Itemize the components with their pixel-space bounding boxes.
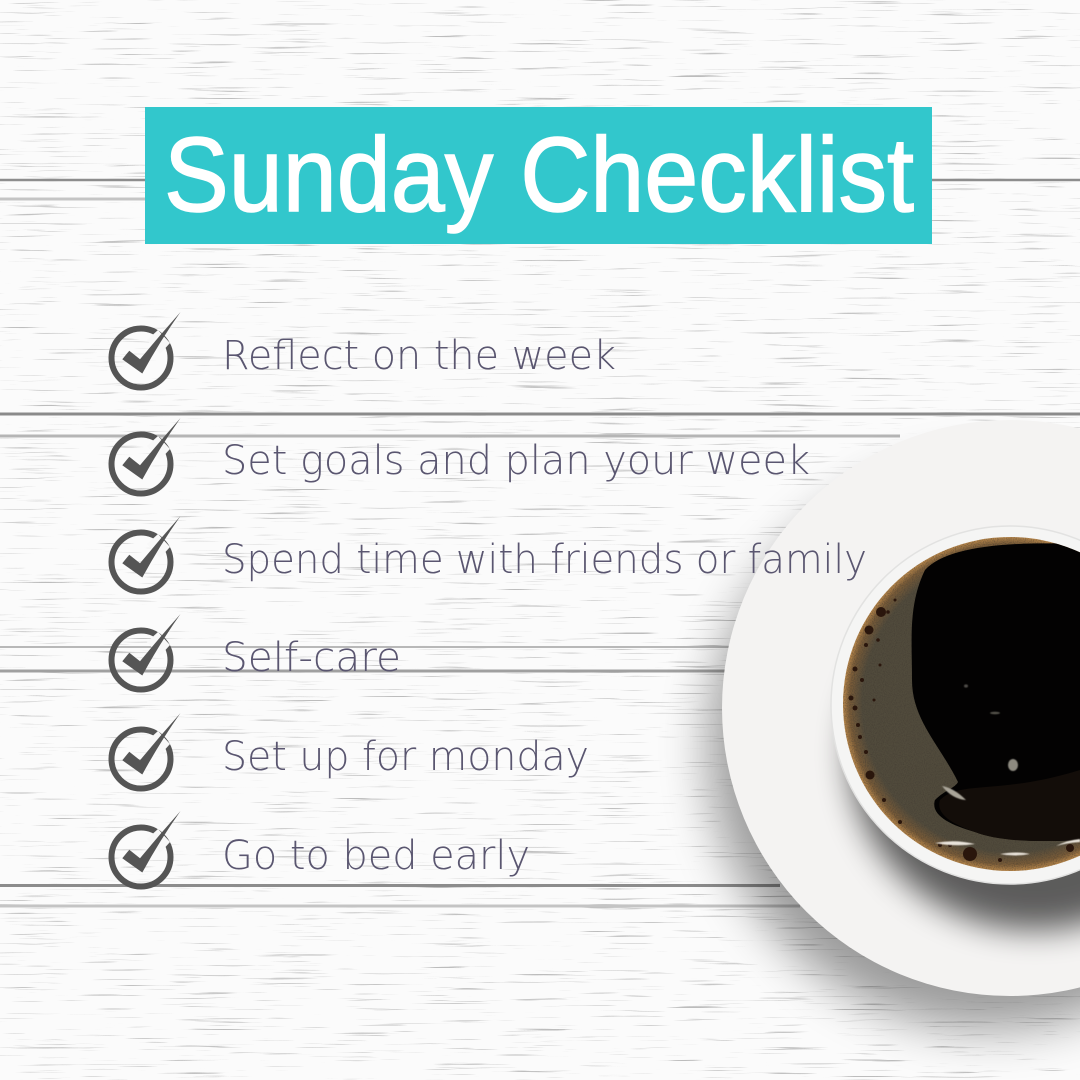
title text: Sunday Checklist	[164, 116, 914, 234]
coffee cup on saucer	[708, 420, 1080, 1030]
bubbles	[848, 598, 1074, 862]
crema ring and foam	[843, 537, 1080, 871]
checklist	[112, 312, 867, 886]
title banner	[145, 107, 932, 244]
item: Spend time with friends or family: Spend time with friends or family	[222, 537, 867, 583]
item: Set up for monday: Set up for monday	[222, 734, 589, 780]
cup shadow on saucer	[826, 712, 1080, 954]
item: Go to bed early: Go to bed early	[222, 833, 530, 879]
item: Set up for monday	[112, 713, 589, 788]
icon: check	[112, 312, 180, 388]
item: Self-care	[112, 614, 401, 690]
cup rim	[831, 526, 1080, 884]
icon: check	[112, 614, 180, 690]
item: Set goals and plan your week	[112, 418, 810, 494]
item: Set goals and plan your week: Set goals and plan your week	[222, 438, 810, 484]
item: Reflect on the week: Reflect on the week	[222, 333, 616, 379]
item: Spend time with friends or family	[112, 516, 867, 592]
icon: check	[112, 713, 180, 788]
saucer shadow	[708, 466, 1080, 1030]
item: Self-care: Self-care	[222, 635, 401, 681]
item: Reflect on the week	[112, 312, 616, 388]
glints	[935, 684, 1080, 856]
icon: check	[112, 811, 180, 886]
item: Go to bed early	[112, 811, 530, 886]
dark coffee surface	[912, 543, 1080, 841]
icon: check	[112, 516, 180, 592]
saucer	[722, 420, 1080, 996]
icon: check	[112, 418, 180, 494]
